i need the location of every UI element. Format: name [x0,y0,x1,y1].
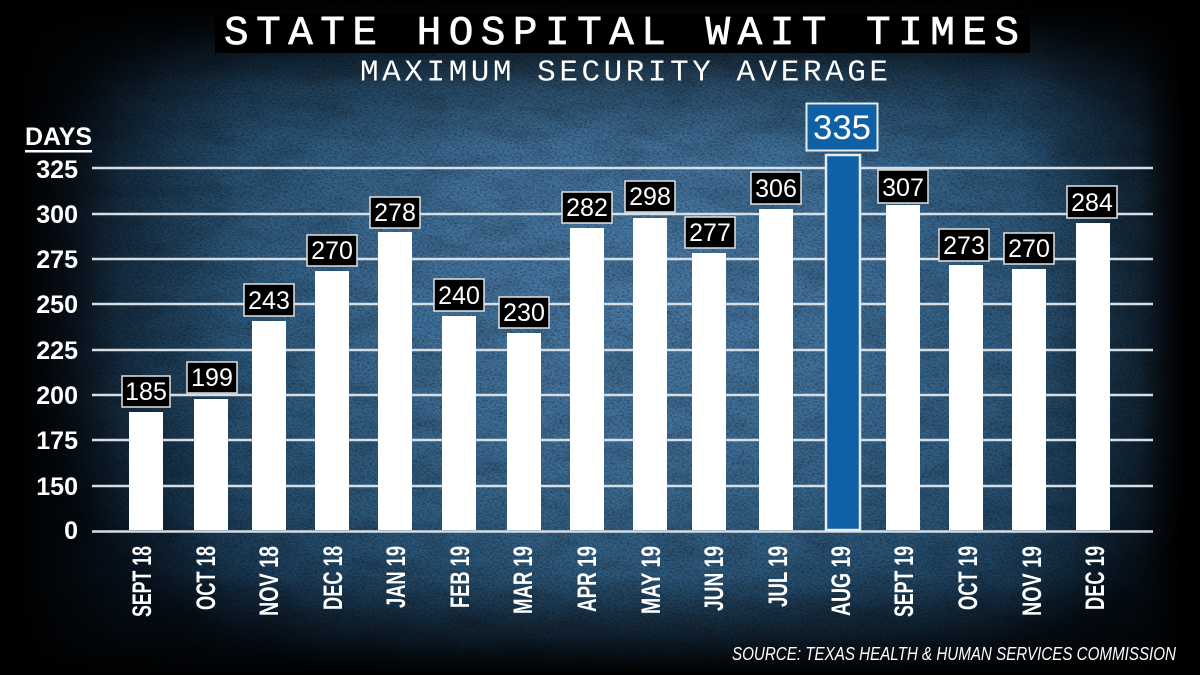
y axis labels: 325 [36,156,78,184]
value labels: 306 [755,175,797,203]
y axis labels: 250 [36,291,78,319]
month labels: JAN 19 [381,546,411,608]
value labels: 199 [191,364,233,392]
value labels: 307 [882,174,924,202]
month labels: OCT 18 [191,546,221,610]
month labels: SEPT 18 [127,546,157,617]
month labels: FEB 19 [445,546,475,608]
month labels: SEPT 19 [889,546,919,617]
y axis labels: 225 [36,337,78,365]
y axis title: DAYS [25,123,92,151]
y axis labels: 150 [36,473,78,501]
subtitle: MAXIMUM SECURITY AVERAGE [360,56,888,90]
value labels: 277 [689,219,731,247]
value labels: 270 [311,237,353,265]
highlighted value: 335: 335 [813,109,871,147]
month labels: DEC 18 [318,546,348,610]
month labels: OCT 19 [953,546,983,610]
month labels: DEC 19 [1080,546,1110,610]
y axis labels: 275 [36,246,78,274]
y axis labels: 300 [36,201,78,229]
y axis labels: 175 [36,427,78,455]
highlighted value: 335 [806,104,878,150]
value labels: 230 [503,299,545,327]
month labels: APR 19 [572,546,602,612]
month labels: JUL 19 [763,546,793,607]
month labels: MAR 19 [508,546,538,614]
y axis labels [36,156,78,545]
value labels: 278 [374,199,416,227]
value labels: 185 [125,378,167,406]
y axis labels: 200 [36,382,78,410]
month labels [127,546,1110,617]
y axis labels: 0 [64,517,78,545]
month labels: AUG 19 [826,546,856,616]
value labels: 282 [566,194,608,222]
value labels: 243 [248,287,290,315]
month labels: MAY 19 [636,546,666,614]
value labels [122,170,1117,407]
value labels: 273 [943,232,985,260]
highlighted bar: Aug 19 [826,155,860,530]
value labels: 298 [629,183,671,211]
month labels: NOV 19 [1017,546,1047,616]
value labels: 240 [438,282,480,310]
title: STATE HOSPITAL WAIT TIMES [224,11,1019,57]
month labels: JUN 19 [699,546,729,611]
value labels: 270 [1008,235,1050,263]
value labels: 284 [1071,189,1113,217]
white monthly bars [129,205,1110,530]
month labels: NOV 18 [254,546,284,616]
